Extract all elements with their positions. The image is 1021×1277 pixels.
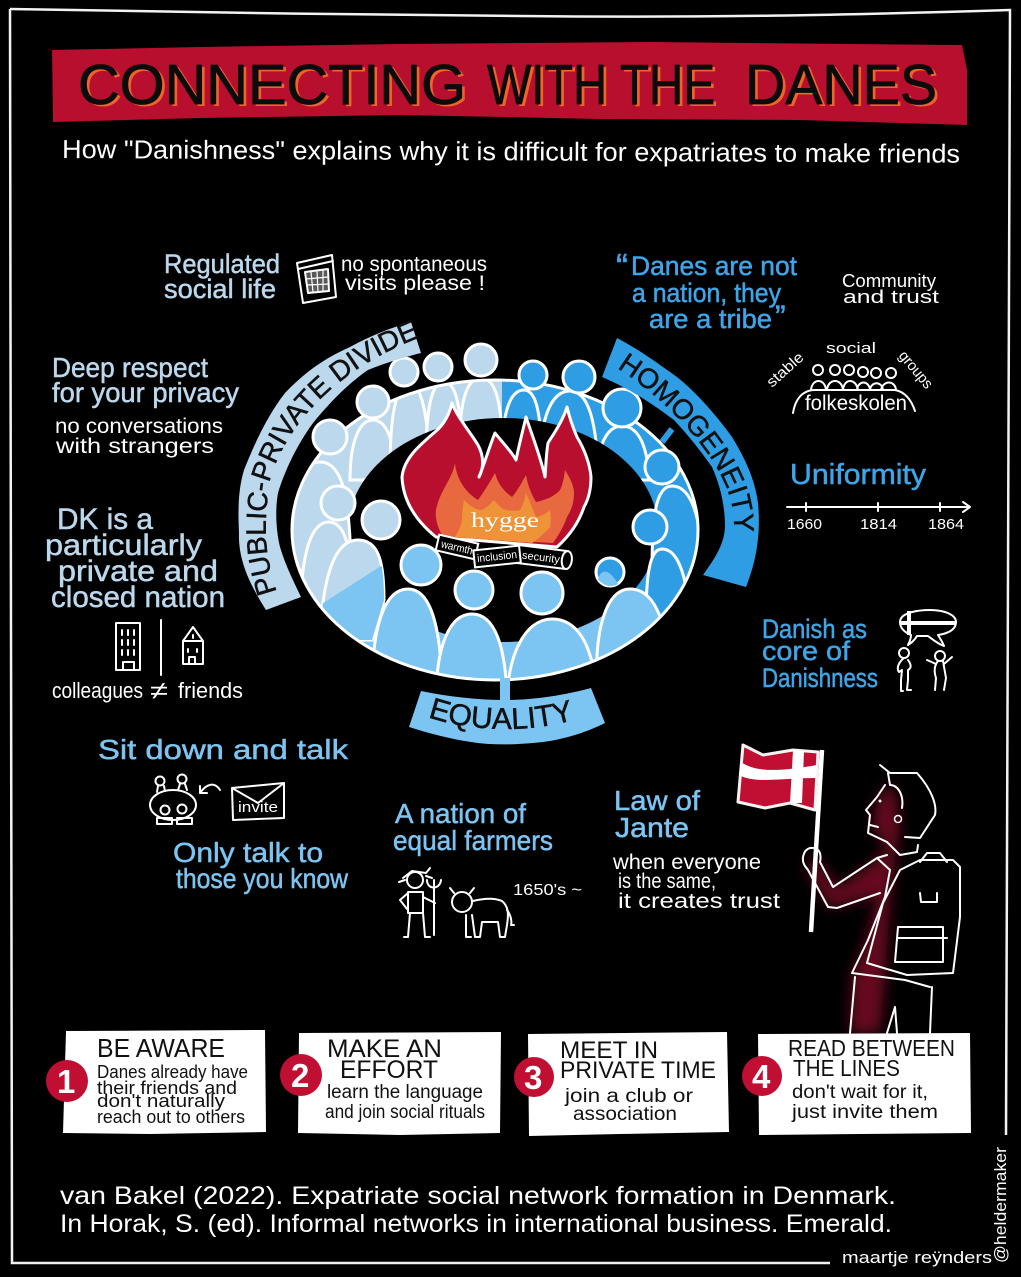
step 2: make an effort: 2 [291, 1057, 309, 1094]
text: invite: invite [238, 799, 278, 816]
illustration: expatriate with Danish flag [738, 745, 960, 1033]
title banner: CONNECTING [81, 55, 469, 119]
step 3: meet in private time: join a club or [564, 1086, 694, 1107]
icon: folkeskolen group: stable [763, 349, 807, 391]
heads [313, 344, 679, 614]
citation: In Horak, S. (ed). Informal networks in international business. Emerald. [60, 1210, 892, 1238]
logs: security [521, 550, 561, 566]
icon: speech bubble with flag and two people [898, 610, 956, 691]
title banner: DANES [748, 55, 940, 119]
quote: tribe: ” [775, 299, 786, 335]
heading: nation of equal farmers: A nation of [395, 798, 526, 829]
text: colleagues not friends: ≠ [150, 677, 168, 705]
icon: farmer and cow [399, 868, 514, 937]
step 4: read between the lines: THE LINES [793, 1055, 900, 1081]
quote: tribe [616, 246, 797, 335]
people ring [280, 344, 710, 700]
text: no conversations: with strangers [55, 435, 214, 458]
text: when everyone is the same: is the same, [618, 870, 716, 893]
text: 1650s: 1650's ~ [513, 882, 582, 899]
step 3: meet in private time: PRIVATE TIME [560, 1057, 716, 1084]
heading: DK private nation: closed nation [51, 581, 225, 614]
text: no spontaneous visits: no spontaneous [341, 253, 487, 276]
heading: uniformity: Uniformity [790, 459, 927, 491]
text: when everyone is the same: when everyone [612, 851, 761, 874]
title banner [52, 42, 967, 125]
step 4: read between the lines [742, 1033, 971, 1135]
title banner: THE [620, 53, 715, 117]
timeline: 1660 [787, 516, 822, 533]
step 2: make an effort: MAKE AN [327, 1035, 442, 1063]
logs [436, 535, 573, 570]
heading: Danish as core: Danishness [762, 663, 878, 693]
quote: tribe: a nation, they [632, 278, 781, 308]
heading: law of jante: Jante [615, 812, 689, 843]
title banner: WITH [487, 53, 607, 117]
heading: DK private nation: DK is a [57, 503, 153, 536]
logs: inclusion [477, 549, 518, 565]
flag [738, 745, 822, 932]
timeline: 1814 [860, 516, 897, 533]
heading: Danish as core: Danish as [762, 614, 867, 644]
band: equality [409, 678, 605, 744]
heading: only talk to those you know [173, 837, 349, 894]
step 1: be aware: don't naturally [97, 1091, 225, 1111]
citation: van Bakel (2022). Expatriate social network formation in Denmark. [60, 1182, 896, 1210]
text: community and trust [842, 271, 939, 307]
panel: public-private notes [45, 249, 487, 705]
title banner: WITH [490, 55, 610, 119]
text: when everyone is the same [612, 851, 780, 913]
step 4: read between the lines: don't wait for it, [792, 1082, 928, 1103]
heading: deep respect [52, 352, 239, 408]
credit: @heldermaker [991, 1147, 1010, 1263]
heading: nation of equal farmers: equal farmers [393, 825, 553, 856]
quote: tribe: Danes are not [631, 251, 797, 281]
timeline [787, 502, 970, 533]
text: when everyone is the same: it creates trust [618, 890, 780, 913]
heading: DK private nation: private and [58, 555, 218, 588]
panel: equality notes [98, 734, 780, 937]
heading: DK private nation [45, 503, 225, 614]
step 2: make an effort [280, 1032, 501, 1135]
heading: sit down and talk: Sit down and talk [98, 734, 349, 765]
person outline [803, 765, 960, 1033]
heading: only talk to those you know: those you know [176, 863, 349, 894]
text: colleagues not friends: colleagues [52, 678, 143, 703]
icon: folkeskolen group: groups [895, 348, 936, 392]
icon: table with invitation [150, 774, 284, 824]
icon: folkeskolen group [763, 340, 936, 415]
band: homogeneity: HOMOGENEITY [618, 352, 754, 532]
band: public-private divide: PUBLIC-PRIVATE DIVIDE [246, 320, 418, 596]
logs: warmth [439, 538, 474, 557]
text: community and trust: Community [842, 271, 936, 291]
step 4: read between the lines: READ BETWEEN [788, 1035, 955, 1061]
step 3: meet in private time: 3 [524, 1059, 542, 1096]
text: no conversations: no conversations [55, 415, 223, 438]
timeline: 1864 [928, 516, 964, 533]
icon: folkeskolen group: social [826, 340, 876, 357]
heading: law of jante: Law of [614, 785, 700, 816]
step 1: be aware: reach out to others [97, 1107, 245, 1127]
subtitle: How "Danishness" explains why it is difficult for expatriates to make friends [62, 134, 960, 169]
heading: law of jante [614, 785, 700, 843]
panel: homogeneity notes [616, 246, 970, 693]
heading: regulated social life: social life [164, 274, 276, 304]
icon: calendar [297, 255, 336, 303]
step 4: read between the lines: 4 [752, 1058, 771, 1095]
step 2: make an effort: and join social rituals [325, 1102, 485, 1123]
fire: hygge: hygge [471, 508, 539, 532]
heading: deep respect: for your privacy [52, 377, 239, 408]
step 3: meet in private time [514, 1032, 729, 1136]
text: no spontaneous visits: visits please ! [345, 272, 485, 295]
icon: office and house [116, 620, 203, 675]
heading: Danish as core: core of [762, 636, 851, 666]
step 1: be aware: their friends and [97, 1078, 237, 1098]
text: community and trust: and trust [843, 287, 939, 307]
text: colleagues not friends [52, 677, 243, 705]
title banner: THE [623, 55, 718, 119]
step 1: be aware: BE AWARE [97, 1033, 225, 1063]
step 3: meet in private time: association [573, 1104, 677, 1125]
step 2: make an effort: EFFORT [340, 1056, 438, 1084]
step 3: meet in private time: MEET IN [560, 1037, 658, 1064]
citation [60, 1182, 896, 1238]
icon: folkeskolen group: folkeskolen [805, 392, 907, 415]
heading: regulated social life: Regulated [164, 249, 280, 279]
title banner: DANES [745, 53, 937, 117]
credit: maartje reÿnders [842, 1248, 992, 1267]
quote: tribe: are a tribe [649, 304, 772, 334]
fire: hygge [402, 403, 591, 570]
step 1: be aware [46, 1030, 266, 1134]
heading: regulated social life [164, 249, 280, 304]
text: no conversations [55, 415, 223, 458]
title banner: CONNECTING [78, 53, 466, 117]
band: equality: EQUALITY [430, 698, 570, 732]
quote: tribe: “ [616, 246, 628, 287]
text: no spontaneous visits [341, 253, 487, 295]
heading: DK private nation: particularly [45, 529, 202, 562]
heading: Danish as core [762, 614, 878, 693]
band: homogeneity [602, 338, 759, 587]
step 2: make an effort: learn the language [327, 1082, 483, 1103]
heading: deep respect: Deep respect [52, 352, 208, 383]
diagram: circle of people around fire [238, 320, 759, 744]
heading: nation of equal farmers [393, 798, 553, 856]
text: colleagues not friends: friends [178, 678, 243, 703]
step 1: be aware: Danes already have [97, 1062, 248, 1082]
credit [842, 1147, 1010, 1267]
step 4: read between the lines: just invite them [791, 1102, 938, 1123]
step 1: be aware: 1 [57, 1063, 75, 1100]
heading: only talk to those you know: Only talk to [173, 837, 323, 868]
